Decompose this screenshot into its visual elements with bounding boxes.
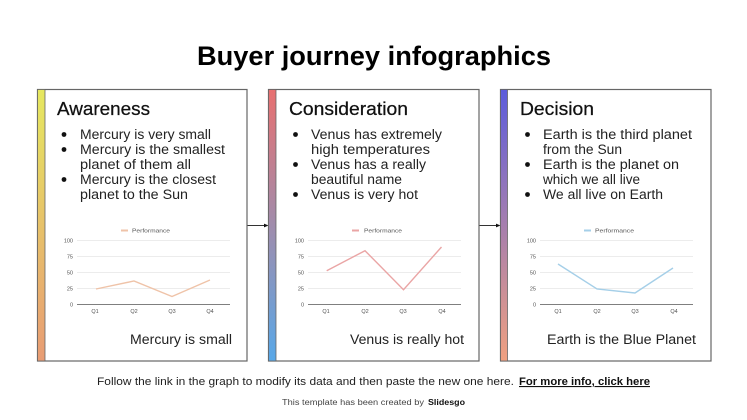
line chart: mercury performance: Q4 bbox=[206, 309, 214, 315]
gradient strip bbox=[38, 90, 45, 361]
heading: Decision bbox=[520, 99, 594, 119]
line chart: earth performance: Q4 bbox=[670, 309, 678, 315]
line chart: venus performance: 0 bbox=[301, 302, 304, 308]
line chart: venus performance: 75 bbox=[298, 254, 304, 260]
bullet list: We all live on Earth bbox=[543, 187, 663, 202]
line chart: venus performance: Q1 bbox=[322, 309, 330, 315]
template credit bbox=[282, 398, 465, 407]
gradient strip bbox=[500, 90, 508, 361]
link text: For more info, click here bbox=[519, 376, 650, 388]
line chart: earth performance: 50 bbox=[530, 270, 536, 276]
panel: consideration bbox=[268, 90, 479, 361]
bullet list: planet of them all bbox=[80, 157, 191, 172]
bullet list bbox=[525, 127, 692, 202]
panel: awareness bbox=[38, 90, 247, 361]
line chart: earth performance bbox=[527, 228, 693, 315]
bullet list: Mercury is the closest bbox=[80, 172, 216, 187]
line chart: earth performance: Q2 bbox=[593, 309, 601, 315]
line chart: mercury performance: Q1 bbox=[91, 309, 99, 315]
line chart: mercury performance: 25 bbox=[67, 286, 73, 292]
line chart: earth performance: 25 bbox=[530, 286, 536, 292]
line chart: mercury performance: Performance bbox=[132, 228, 170, 234]
line chart: earth performance: Q1 bbox=[554, 309, 562, 315]
gradient strip bbox=[268, 90, 276, 361]
line chart: venus performance: Q4 bbox=[438, 309, 446, 315]
panel frame bbox=[500, 90, 711, 361]
template credit: Slidesgo bbox=[428, 398, 465, 407]
line chart: mercury performance: 0 bbox=[70, 302, 73, 308]
footer note: Follow the link in the graph to modify its data and then paste the new one here. bbox=[97, 376, 514, 388]
line chart: venus performance: 50 bbox=[298, 270, 304, 276]
line chart: mercury performance: Q2 bbox=[130, 309, 138, 315]
line chart: earth performance: 100 bbox=[527, 238, 536, 244]
caption: Mercury is small bbox=[130, 332, 232, 347]
line chart: earth performance: 75 bbox=[530, 254, 536, 260]
line chart: venus performance: Q2 bbox=[361, 309, 369, 315]
bullet list: Venus has a really bbox=[311, 157, 426, 172]
bullet list: Venus has extremely bbox=[311, 127, 442, 142]
bullet list: planet to the Sun bbox=[80, 187, 188, 202]
template credit: This template has been created by bbox=[282, 398, 424, 407]
line chart: mercury performance: 50 bbox=[67, 270, 73, 276]
line chart: venus performance: 25 bbox=[298, 286, 304, 292]
bullet list: from the Sun bbox=[543, 142, 622, 157]
bullet list: high temperatures bbox=[311, 142, 430, 157]
line chart: earth performance: 0 bbox=[533, 302, 536, 308]
caption: Earth is the Blue Planet bbox=[547, 332, 696, 347]
footer note bbox=[97, 376, 650, 388]
bullet list: Mercury is very small bbox=[80, 127, 211, 142]
bullet list: Venus is very hot bbox=[311, 187, 418, 202]
line chart: earth performance: Performance bbox=[595, 228, 634, 234]
line chart: venus performance: 100 bbox=[295, 238, 304, 244]
bullet list bbox=[293, 127, 442, 202]
title: Buyer journey infographics bbox=[197, 41, 551, 71]
heading: Awareness bbox=[57, 99, 150, 119]
panel frame bbox=[38, 90, 247, 361]
bullet list: Mercury is the smallest bbox=[80, 142, 225, 157]
line chart: earth performance: Q3 bbox=[631, 309, 639, 315]
line chart: venus performance: Performance bbox=[364, 228, 402, 234]
line chart: mercury performance: 75 bbox=[67, 254, 73, 260]
bullet list: Earth is the third planet bbox=[543, 127, 692, 142]
line chart: mercury performance: Q3 bbox=[168, 309, 176, 315]
arrow: awareness to consideration bbox=[247, 224, 268, 227]
bullet list: Earth is the planet on bbox=[543, 157, 679, 172]
bullet list: which we all live bbox=[542, 172, 640, 187]
line chart: mercury performance: 100 bbox=[64, 238, 73, 244]
heading: Consideration bbox=[289, 99, 408, 119]
panel: decision bbox=[500, 90, 711, 361]
bullet list bbox=[62, 127, 225, 202]
line chart: venus performance bbox=[295, 228, 461, 315]
line chart: mercury performance bbox=[64, 228, 230, 315]
arrow: consideration to decision bbox=[479, 224, 500, 227]
caption: Venus is really hot bbox=[350, 332, 464, 347]
line chart: venus performance: Q3 bbox=[399, 309, 407, 315]
panel frame bbox=[268, 90, 479, 361]
bullet list: beautiful name bbox=[311, 172, 402, 187]
